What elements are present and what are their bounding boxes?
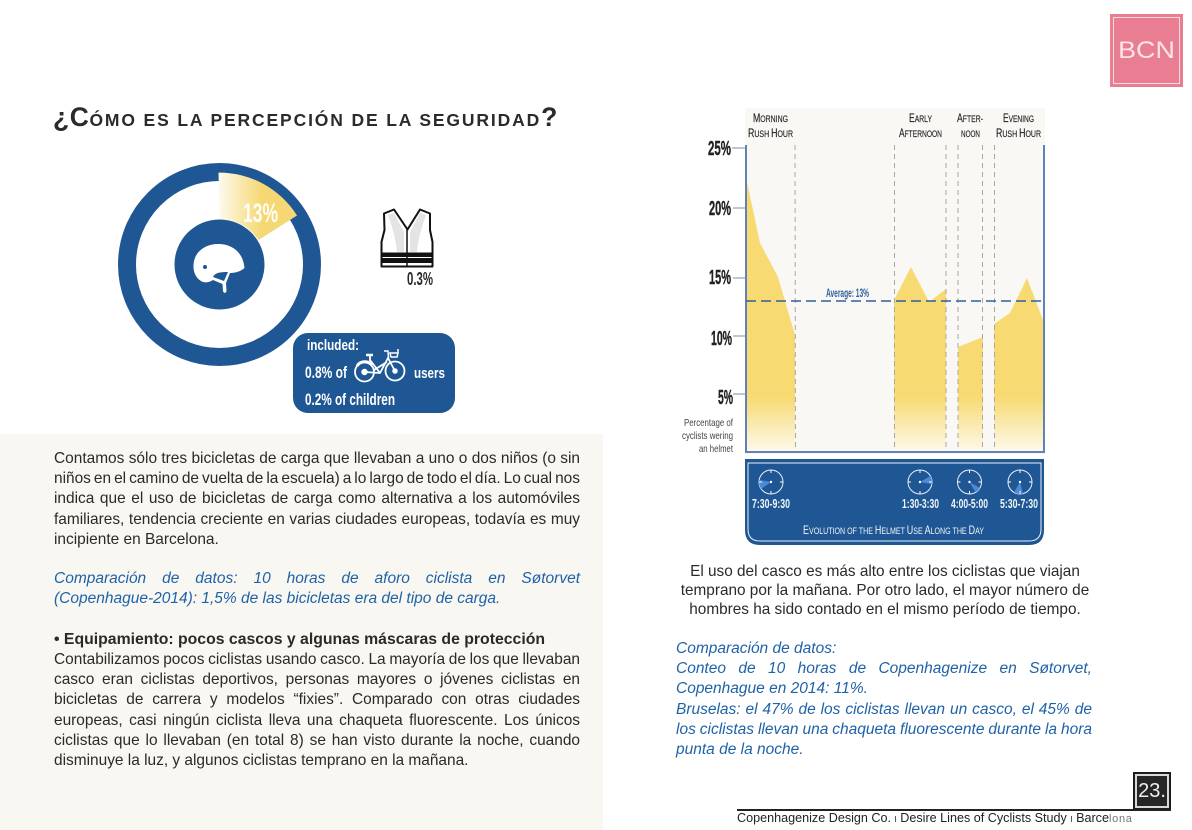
text block: helmet use summary: hombres ha sido contado en el mismo período de tiempo. (689, 601, 1081, 618)
text block: equipment paragraph: disminuye la luz, y algunos ciclistas temprano en la mañana. (54, 752, 468, 769)
callout: included users: 0.8% of (305, 363, 347, 382)
label: average: Average: 13% (826, 288, 869, 300)
text block: Copenhagen data comparison: (Copenhague-2014): 1,5% de las bicicletas era del tipo de carga. (54, 590, 500, 607)
column headers: AFTER- (957, 111, 983, 125)
text block: equipment paragraph: casco eran ciclistas deportivos, personas mayores o jóvenes ciclistas en (54, 671, 580, 688)
icon: helmet (193, 244, 244, 293)
footer rule (737, 809, 1171, 811)
text block: helmet use summary: temprano por la mañana. Por otro lado, el mayor número de (681, 582, 1089, 599)
clock time labels: 5:30-7:30 (1000, 496, 1038, 511)
text block: equipment paragraph: europeas, casi ningún ciclista lleva una chaqueta fluorescente. Los únicos (54, 712, 580, 729)
axis caption: Percentage of (684, 417, 733, 429)
legend caption: EVOLUTION OF THE HELMET USE ALONG THE DAY (803, 523, 984, 537)
text block: cargo bikes paragraph: familiares, tendencia creciente en varias ciudades europeas, todavía es muy (54, 511, 580, 528)
y axis ticks and labels: 15% (709, 267, 731, 289)
clock 4:00-5:00 (958, 470, 982, 494)
y axis ticks and labels: 25% (708, 138, 731, 160)
text block: data comparison Copenhagen and Brussels: Copenhague en 2014: 11%. (676, 680, 868, 697)
text block: data comparison Copenhagen and Brussels: los ciclistas llevan una chaqueta fluorescente durante la hora (676, 721, 1092, 738)
axis caption: an helmet (699, 443, 733, 455)
axis caption (682, 417, 733, 455)
clock time labels: 7:30-9:30 (752, 496, 790, 511)
column headers: NOON (961, 129, 980, 140)
callout: included users: users (414, 365, 445, 382)
column headers: RUSH HOUR (748, 126, 793, 140)
text block: cargo bikes paragraph (54, 450, 580, 548)
footer text: Copenhagenize Design Co. I Desire Lines of Cyclists Study I Barcelona (737, 811, 1133, 825)
text block: cargo bikes paragraph: incipiente en Barcelona. (54, 531, 219, 548)
text block: data comparison Copenhagen and Brussels: Conteo de 10 horas de Copenhagenize en Søtorvet, (676, 660, 1092, 677)
y axis ticks and labels: 10% (711, 328, 732, 350)
logo: BCN badge (1110, 14, 1183, 87)
column headers: RUSH HOUR (996, 126, 1041, 140)
logo: BCN badge: BCN (1118, 37, 1175, 64)
y axis ticks and labels (708, 138, 746, 409)
text block: data comparison Copenhagen and Brussels: punta de la noche. (676, 741, 804, 758)
text block: cargo bikes paragraph: indica que el uso de bicicletas de carga como alternativa a los automóviles (54, 490, 580, 507)
icon: cargo bike (355, 349, 404, 382)
text block: Copenhagen data comparison: Comparación de datos: 10 horas de aforo ciclista en Søtorvet (54, 570, 580, 587)
text block: helmet use summary: El uso del casco es más alto entre los ciclistas que viajan (690, 563, 1080, 580)
title: ¿CÓMO ES LA PERCEPCIÓN DE LA SEGURIDAD? (53, 102, 558, 132)
column headers: MORNING (753, 111, 788, 125)
text block: cargo bikes paragraph: niños en el camino de vuelta de la escuela) a lo largo de todo el día. Lo cual nos (54, 470, 580, 487)
clock 5:30-7:30 (1008, 470, 1032, 494)
callout: included users: included: (307, 337, 359, 354)
column headers: EARLY (909, 111, 932, 125)
text block: data comparison Copenhagen and Brussels: Bruselas: el 47% de los ciclistas llevan un casco, el 45% de (676, 701, 1092, 718)
clock 7:30-9:30 (759, 470, 783, 494)
chart areas: yellow helmet percentage (746, 177, 1043, 452)
axis caption: cyclists wering (682, 430, 733, 442)
text block: Copenhagen data comparison (54, 570, 581, 607)
text block: cargo bikes paragraph: Contamos sólo tres bicicletas de carga que llevaban a uno o dos niños (o sin (54, 450, 580, 467)
column headers (748, 111, 1041, 140)
page number (1133, 772, 1171, 810)
heading: equipment: • Equipamiento: pocos cascos y algunas máscaras de protección (54, 631, 545, 648)
callout: included users: 0.2% of children (305, 390, 395, 409)
y axis ticks and labels: 5% (718, 387, 733, 409)
text block: helmet use summary (681, 563, 1089, 618)
text block: data comparison Copenhagen and Brussels (676, 640, 1092, 758)
clock time labels: 4:00-5:00 (951, 496, 988, 511)
text block: equipment paragraph: ciclistas que lo llevaban (en total 8) se han visto durante la noche, cuando (54, 732, 580, 749)
panel: beige text background (0, 434, 603, 830)
page number: 23. (1138, 780, 1166, 802)
label 13%: 13% (243, 198, 278, 228)
donut wedge 13% (218, 173, 297, 240)
y axis ticks and labels: 20% (709, 198, 731, 220)
column headers: AFTERNOON (899, 126, 942, 140)
clock time labels (752, 496, 1038, 511)
clock 1:30-3:30 (908, 470, 932, 494)
text block: equipment paragraph: bicicletas de carrera y modelos “fixies”. Comparado con otras ciudades (54, 691, 580, 708)
icon: high visibility vest 0.3%: 0.3% (407, 269, 433, 289)
clock time labels: 1:30-3:30 (902, 496, 939, 511)
text block: data comparison Copenhagen and Brussels: Comparación de datos: (676, 640, 836, 657)
column headers: EVENING (1003, 111, 1034, 125)
text block: equipment paragraph (54, 651, 580, 769)
text block: equipment paragraph: Contabilizamos pocos ciclistas usando casco. La mayoría de los que llevaban (54, 651, 580, 668)
